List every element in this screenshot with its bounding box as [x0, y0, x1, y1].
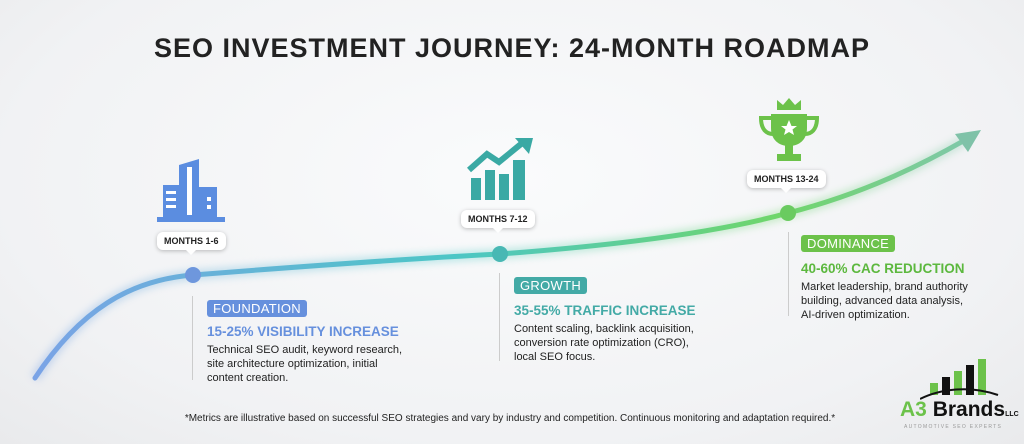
panel: dominance — [788, 232, 968, 321]
description: foundation — [207, 344, 402, 384]
description: dominance: building, advanced data analysis, — [801, 295, 963, 307]
pill: dominance: DOMINANCE — [807, 236, 889, 251]
logo: A3 Brands — [900, 359, 1019, 430]
stat: traffic: 35-55% TRAFFIC INCREASE — [514, 303, 696, 318]
label: months 7-12 — [461, 210, 535, 228]
arrow head — [955, 130, 981, 152]
description: foundation: Technical SEO audit, keyword research, — [207, 344, 402, 356]
description: growth — [514, 323, 694, 363]
dots — [185, 267, 201, 283]
pill: foundation: FOUNDATION — [213, 301, 301, 316]
description: growth: Content scaling, backlink acquisition, — [514, 323, 694, 335]
description: dominance: AI-driven optimization. — [801, 309, 910, 321]
description: foundation: site architecture optimization, initial — [207, 358, 378, 370]
stat: cac: 40-60% CAC REDUCTION — [801, 261, 965, 276]
panel: foundation — [192, 296, 402, 384]
label: months 1-6 — [157, 232, 226, 250]
label: months 7-12: MONTHS 7-12 — [468, 214, 528, 224]
logo: A3 Brands: AUTOMOTIVE SEO EXPERTS — [904, 424, 1002, 430]
description: dominance — [801, 281, 968, 321]
description: foundation: content creation. — [207, 372, 288, 384]
stat: visibility: 15-25% VISIBILITY INCREASE — [207, 324, 399, 339]
description: growth: local SEO focus. — [514, 351, 595, 363]
pill: growth: GROWTH — [520, 278, 581, 293]
label: months 13-24: MONTHS 13-24 — [754, 174, 819, 184]
label: months 1-6: MONTHS 1-6 — [164, 236, 219, 246]
icon: trophy — [759, 98, 819, 161]
description: dominance: Market leadership, brand authority — [801, 281, 968, 293]
icon: growth chart — [467, 138, 533, 200]
title: SEO INVESTMENT JOURNEY: 24-MONTH ROADMAP — [154, 33, 870, 63]
panel: growth — [499, 273, 696, 363]
footnote: *Metrics are illustrative based on successful SEO strategies and vary by industry and competition. Continuous monitoring and adaptation required.* — [185, 413, 835, 424]
icon: building — [157, 159, 225, 222]
label: months 13-24 — [747, 170, 826, 188]
description: growth: conversion rate optimization (CRO), — [514, 337, 689, 349]
logo: A3 Brands: A3 BrandsLLC — [900, 398, 1019, 421]
